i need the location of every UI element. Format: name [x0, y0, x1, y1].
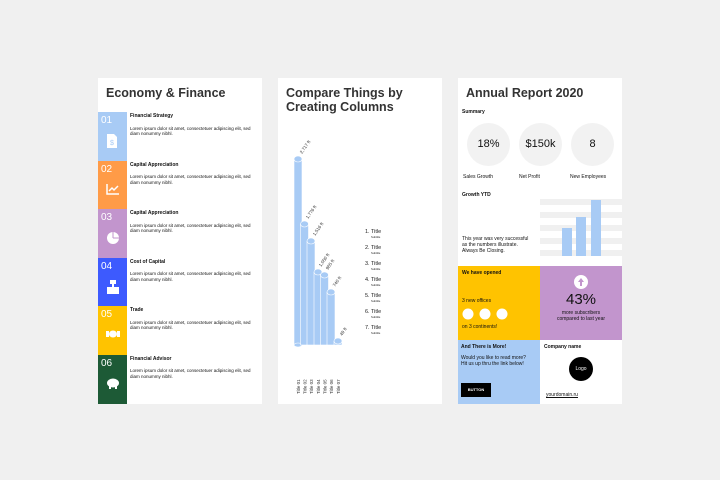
item 01: Financial Strategy [130, 113, 173, 119]
yellow block: offices: We have opened [462, 270, 501, 276]
legend: 5. Title [365, 293, 381, 299]
yellow block: offices: 3 new offices [462, 298, 491, 304]
item 06: 06 [101, 358, 112, 368]
column chart: Title 05 [322, 379, 328, 394]
purple block: subscribers: compared to last year [557, 316, 605, 322]
panel: compare columns [278, 78, 442, 404]
column chart: Title 03 [309, 379, 314, 394]
column chart: 985 ft [325, 258, 336, 271]
column chart: 1,050 ft [318, 252, 331, 268]
item 05: 05 [101, 309, 112, 320]
item 03: 03 [101, 212, 112, 223]
column chart [294, 139, 348, 394]
legend: 2. Title [365, 245, 381, 251]
stat circles: Net Profit [519, 174, 540, 180]
item 01 [98, 112, 251, 161]
legend: 6. Title [365, 309, 381, 315]
yellow block: offices: on 3 continents! [462, 324, 497, 330]
stat circles: Sales Growth [463, 174, 493, 180]
company block: Company name [544, 344, 581, 350]
blue block: more: And There is More! [461, 344, 506, 350]
purple block: subscribers [540, 266, 622, 340]
item 05: Trade [130, 307, 143, 313]
button [461, 383, 491, 397]
item 06: Lorem ipsum dolor sit amet, consectetuer adipiscing elit, sed diam nonummy nibhl. [130, 368, 251, 378]
legend: 7. Title [365, 325, 381, 331]
legend: Subtitle [371, 299, 381, 303]
title [286, 86, 403, 114]
summary label: Summary [462, 109, 485, 115]
purple block: subscribers: more subscribers [562, 310, 600, 316]
column chart: Title 04 [316, 379, 321, 394]
blue block: more: Would you like to read more? [461, 355, 526, 361]
legend: Subtitle [371, 331, 381, 335]
legend: 4. Title [365, 277, 381, 283]
legend: Subtitle [371, 315, 381, 319]
blue block: more: Hit us up thru the link below! [461, 361, 524, 367]
yellow block: offices [458, 266, 540, 340]
bar chart [540, 199, 622, 256]
column chart: 2,717 ft [299, 139, 312, 155]
item 01: 01 [101, 115, 112, 126]
panel: economy & finance [98, 78, 262, 404]
item 04: Cost of Capital [130, 258, 165, 264]
item 05: Lorem ipsum dolor sit amet, consectetuer adipiscing elit, sed diam nonummy nibhl. [130, 320, 251, 330]
item 03: Lorem ipsum dolor sit amet, consectetuer adipiscing elit, sed diam nonummy nibhl. [130, 222, 251, 233]
item 01: Lorem ipsum dolor sit amet, consectetuer adipiscing elit, sed diam nonummy nibhl. [130, 126, 251, 136]
legend: 1. Title [365, 229, 381, 235]
item 06 [98, 355, 251, 404]
growth text: This year was very successful as the numbers illustrate. Always Be Closing. [462, 236, 528, 254]
panel: annual report [458, 78, 622, 404]
item 04: Lorem ipsum dolor sit amet, consectetuer adipiscing elit, sed diam nonummy nibhl. [130, 271, 251, 282]
column chart: 1,516 ft [312, 221, 325, 237]
legend: 3. Title [365, 261, 381, 267]
legend: Subtitle [371, 235, 381, 239]
legend: Subtitle [371, 251, 381, 255]
stat circles: New Employees [570, 174, 606, 180]
title: Creating Columns [286, 100, 394, 114]
company block [544, 344, 593, 398]
stat circles: $150k [526, 138, 555, 150]
column chart: Title 06 [329, 379, 334, 394]
legend: Subtitle [371, 267, 381, 271]
item 04 [98, 258, 251, 306]
company block: Logo [575, 366, 587, 372]
legend [365, 229, 381, 335]
item 03: Capital Appreciation [130, 210, 178, 216]
stat circles: 8 [589, 138, 596, 150]
stat circles [463, 123, 614, 180]
title: Compare Things by [286, 86, 403, 100]
title: Economy & Finance [106, 86, 225, 100]
column chart: Title 01 [296, 379, 301, 394]
growth ytd: Growth YTD [462, 192, 491, 198]
button: BUTTON [468, 387, 484, 392]
column chart: 740 ft [332, 275, 343, 288]
item 02: Lorem ipsum dolor sit amet, consectetuer adipiscing elit, sed diam nonummy nibhl. [130, 174, 251, 184]
stat circles: 18% [477, 138, 500, 150]
column chart: 1,776 ft [305, 204, 318, 220]
column chart: 49 ft [339, 326, 348, 337]
item 05 [98, 306, 251, 355]
blue block: more [458, 340, 540, 404]
purple block: subscribers: 43% [566, 291, 596, 308]
item 02 [98, 161, 251, 209]
item 06: Financial Advisor [130, 356, 172, 362]
title: Annual Report 2020 [466, 86, 583, 100]
company block: yourdomain.ru [546, 392, 578, 398]
item 01: $ [110, 140, 114, 147]
column chart: Title 02 [302, 379, 308, 394]
item 04: 04 [101, 260, 112, 272]
item 02: 02 [101, 164, 112, 174]
item 03 [98, 209, 251, 258]
item 02: Capital Appreciation [130, 162, 178, 168]
legend: Subtitle [371, 283, 381, 287]
column chart: Title 07 [336, 379, 341, 394]
